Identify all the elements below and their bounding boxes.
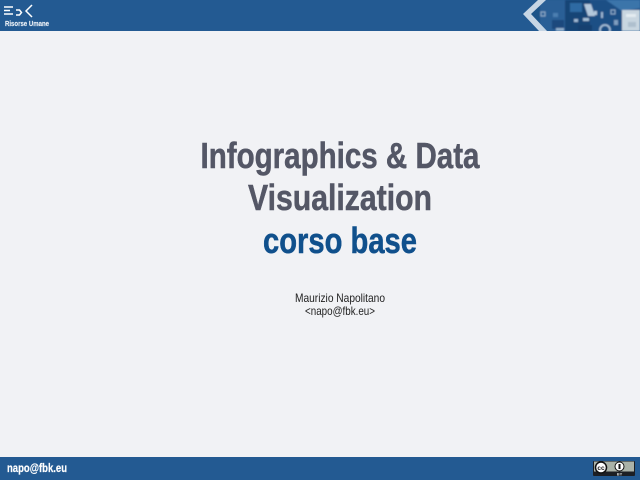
author block: Maurizio Napolitano	[295, 291, 385, 305]
subtitle: corso base	[263, 220, 417, 261]
icon: CC BY licence badge: BY	[617, 472, 623, 476]
footer bar	[0, 457, 640, 480]
header image collage	[523, 0, 640, 31]
title: Visualization	[248, 177, 432, 218]
footer email: napo@fbk.eu	[7, 461, 67, 475]
author block: <napo@fbk.eu>	[305, 304, 375, 318]
author block	[295, 291, 385, 318]
logo: FBK Risorse Umane: Risorse Umane	[5, 19, 49, 28]
title	[200, 135, 480, 261]
icon: CC BY licence badge: cc	[597, 465, 605, 472]
chevron	[523, 0, 547, 31]
logo: FBK Risorse Umane	[4, 5, 49, 28]
title: Infographics & Data	[200, 135, 480, 176]
header bar	[0, 0, 640, 31]
icon: CC BY licence badge	[593, 461, 635, 476]
